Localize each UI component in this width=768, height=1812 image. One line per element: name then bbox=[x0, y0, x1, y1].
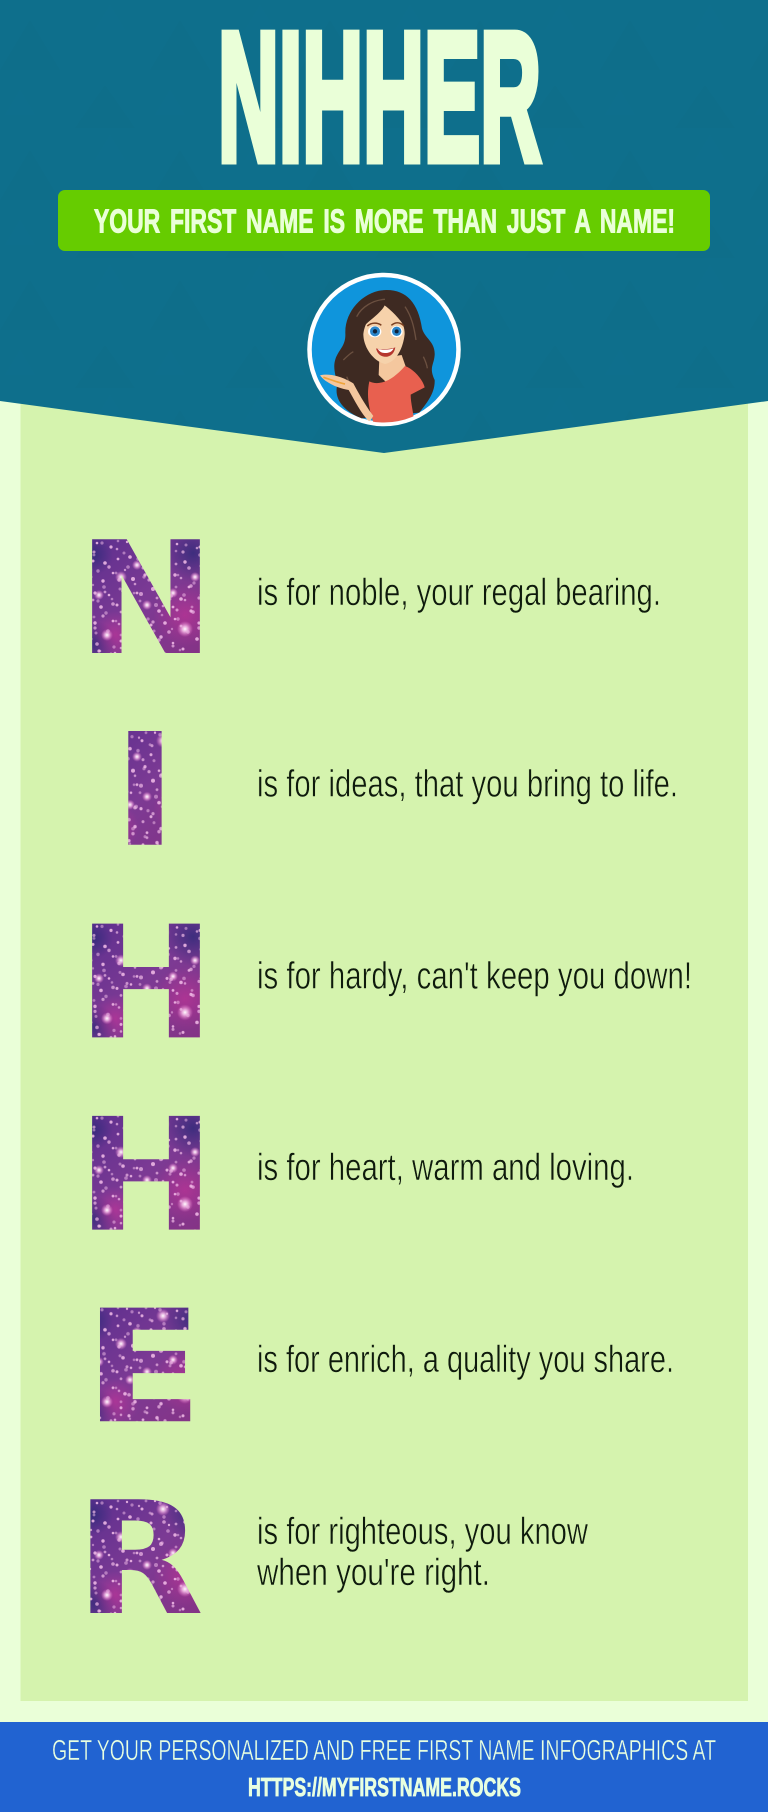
shirt bbox=[368, 366, 425, 425]
subtitle banner bbox=[58, 190, 710, 251]
inner content panel bbox=[20, 395, 748, 1701]
text: H meaning: is for heart, warm and loving. bbox=[257, 1147, 634, 1189]
face bbox=[363, 305, 405, 364]
text: N meaning: is for noble, your regal bearing. bbox=[257, 572, 661, 614]
letter E: E bbox=[84, 1276, 203, 1458]
neck bbox=[379, 355, 406, 383]
letter R: R bbox=[75, 1468, 204, 1650]
arm and hand bbox=[320, 375, 373, 422]
letter I: I bbox=[112, 700, 178, 882]
footer bbox=[0, 1722, 768, 1812]
outer page background bbox=[0, 395, 768, 1725]
icon: woman avatar in circle bbox=[310, 275, 458, 425]
mouth bbox=[376, 347, 395, 357]
eyes bbox=[368, 326, 381, 337]
header band with chevron bbox=[0, 0, 768, 453]
row: R bbox=[75, 1468, 588, 1650]
row: E bbox=[84, 1276, 674, 1458]
row: H second bbox=[77, 1085, 634, 1267]
text: R meaning: is for righteous, you know bbox=[257, 1511, 588, 1553]
row: H bbox=[77, 892, 692, 1074]
row: N bbox=[77, 508, 661, 690]
hair bbox=[334, 290, 435, 418]
letter N: N bbox=[77, 508, 215, 690]
row: I bbox=[112, 700, 678, 882]
letter H: H bbox=[77, 892, 215, 1074]
footer url: HTTPS://MYFIRSTNAME.ROCKS bbox=[248, 1772, 521, 1802]
letter H: H bbox=[77, 1085, 215, 1267]
row: R: when you're right. bbox=[256, 1552, 490, 1594]
